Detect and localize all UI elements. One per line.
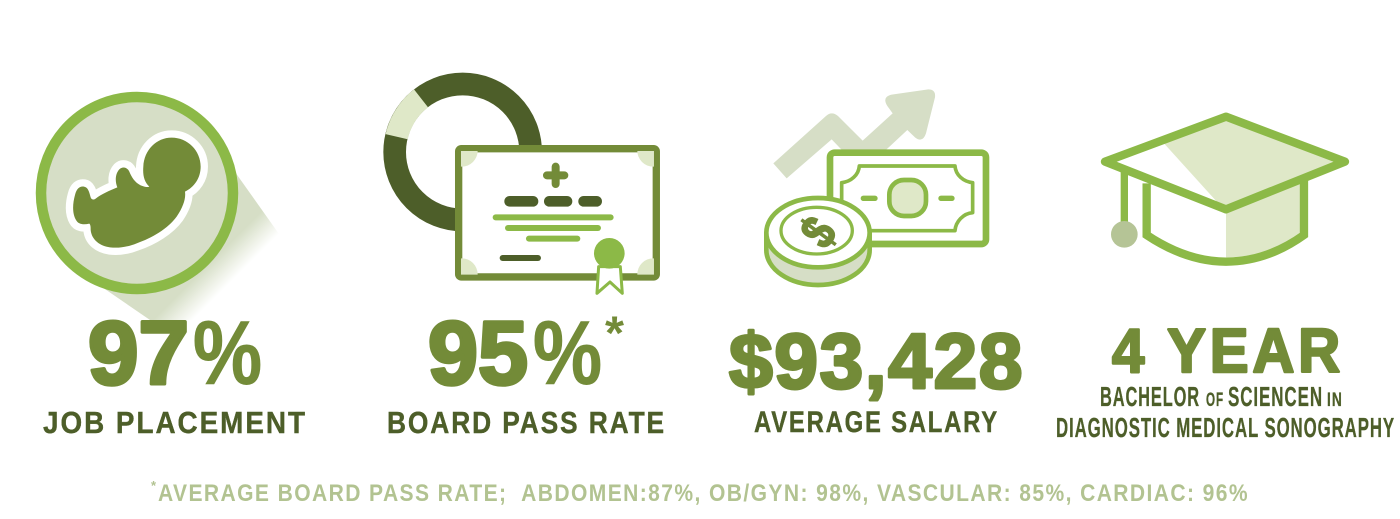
certificate plus emblem [547,167,564,184]
label: job placement: JOB PLACEMENT [43,405,307,440]
certificate ribbon seal [594,238,625,293]
certificate frame [455,145,660,281]
certificate text lines [493,214,614,242]
footnote: * [151,478,158,493]
label: bachelor of science in: SCIENCEN [1228,381,1323,412]
value: $93,428: $93,428 [729,317,1024,405]
rising arrow [773,89,935,178]
cap board [1105,117,1345,209]
bank note [830,153,986,244]
stat: board pass rate [387,84,669,440]
value: 95% [428,304,602,404]
cap body [1147,180,1304,262]
label: bachelor of science in: BACHELOR [1100,381,1200,412]
icon: donut and certificate [395,84,669,293]
value: 97%: 97 [88,304,189,404]
footnote asterisk: * [605,306,625,359]
certificate title bars [504,196,602,207]
stat: average salary [729,89,1024,439]
donut ring [395,84,531,220]
coin [766,198,870,285]
tassel [1111,168,1138,248]
footnote: AVERAGE BOARD PASS RATE; ABDOMEN:87%, OB/GYN: 98%, VASCULAR: 85%, CARDIAC: 96% [158,480,1249,507]
label: board pass rate: BOARD PASS RATE [387,405,666,440]
stat: job placement [41,97,307,440]
label: average salary: AVERAGE SALARY [754,406,999,439]
coin: $ [789,207,847,258]
label: bachelor of science in: OF [1206,390,1224,411]
value: 95%: % [533,304,602,404]
stat: four year degree [1056,117,1395,443]
value: 4 year: 4 YEAR [1112,317,1344,386]
value: 95%: 95 [428,304,528,404]
icon: graduation cap [1105,117,1345,262]
value: 97% [88,304,262,404]
icon: money and rising arrow [766,89,986,285]
certificate signature [500,255,541,261]
icon: fetus in circle with long shadow [41,97,279,320]
label: bachelor of science in: IN [1327,390,1343,411]
value: 97%: % [193,304,262,404]
